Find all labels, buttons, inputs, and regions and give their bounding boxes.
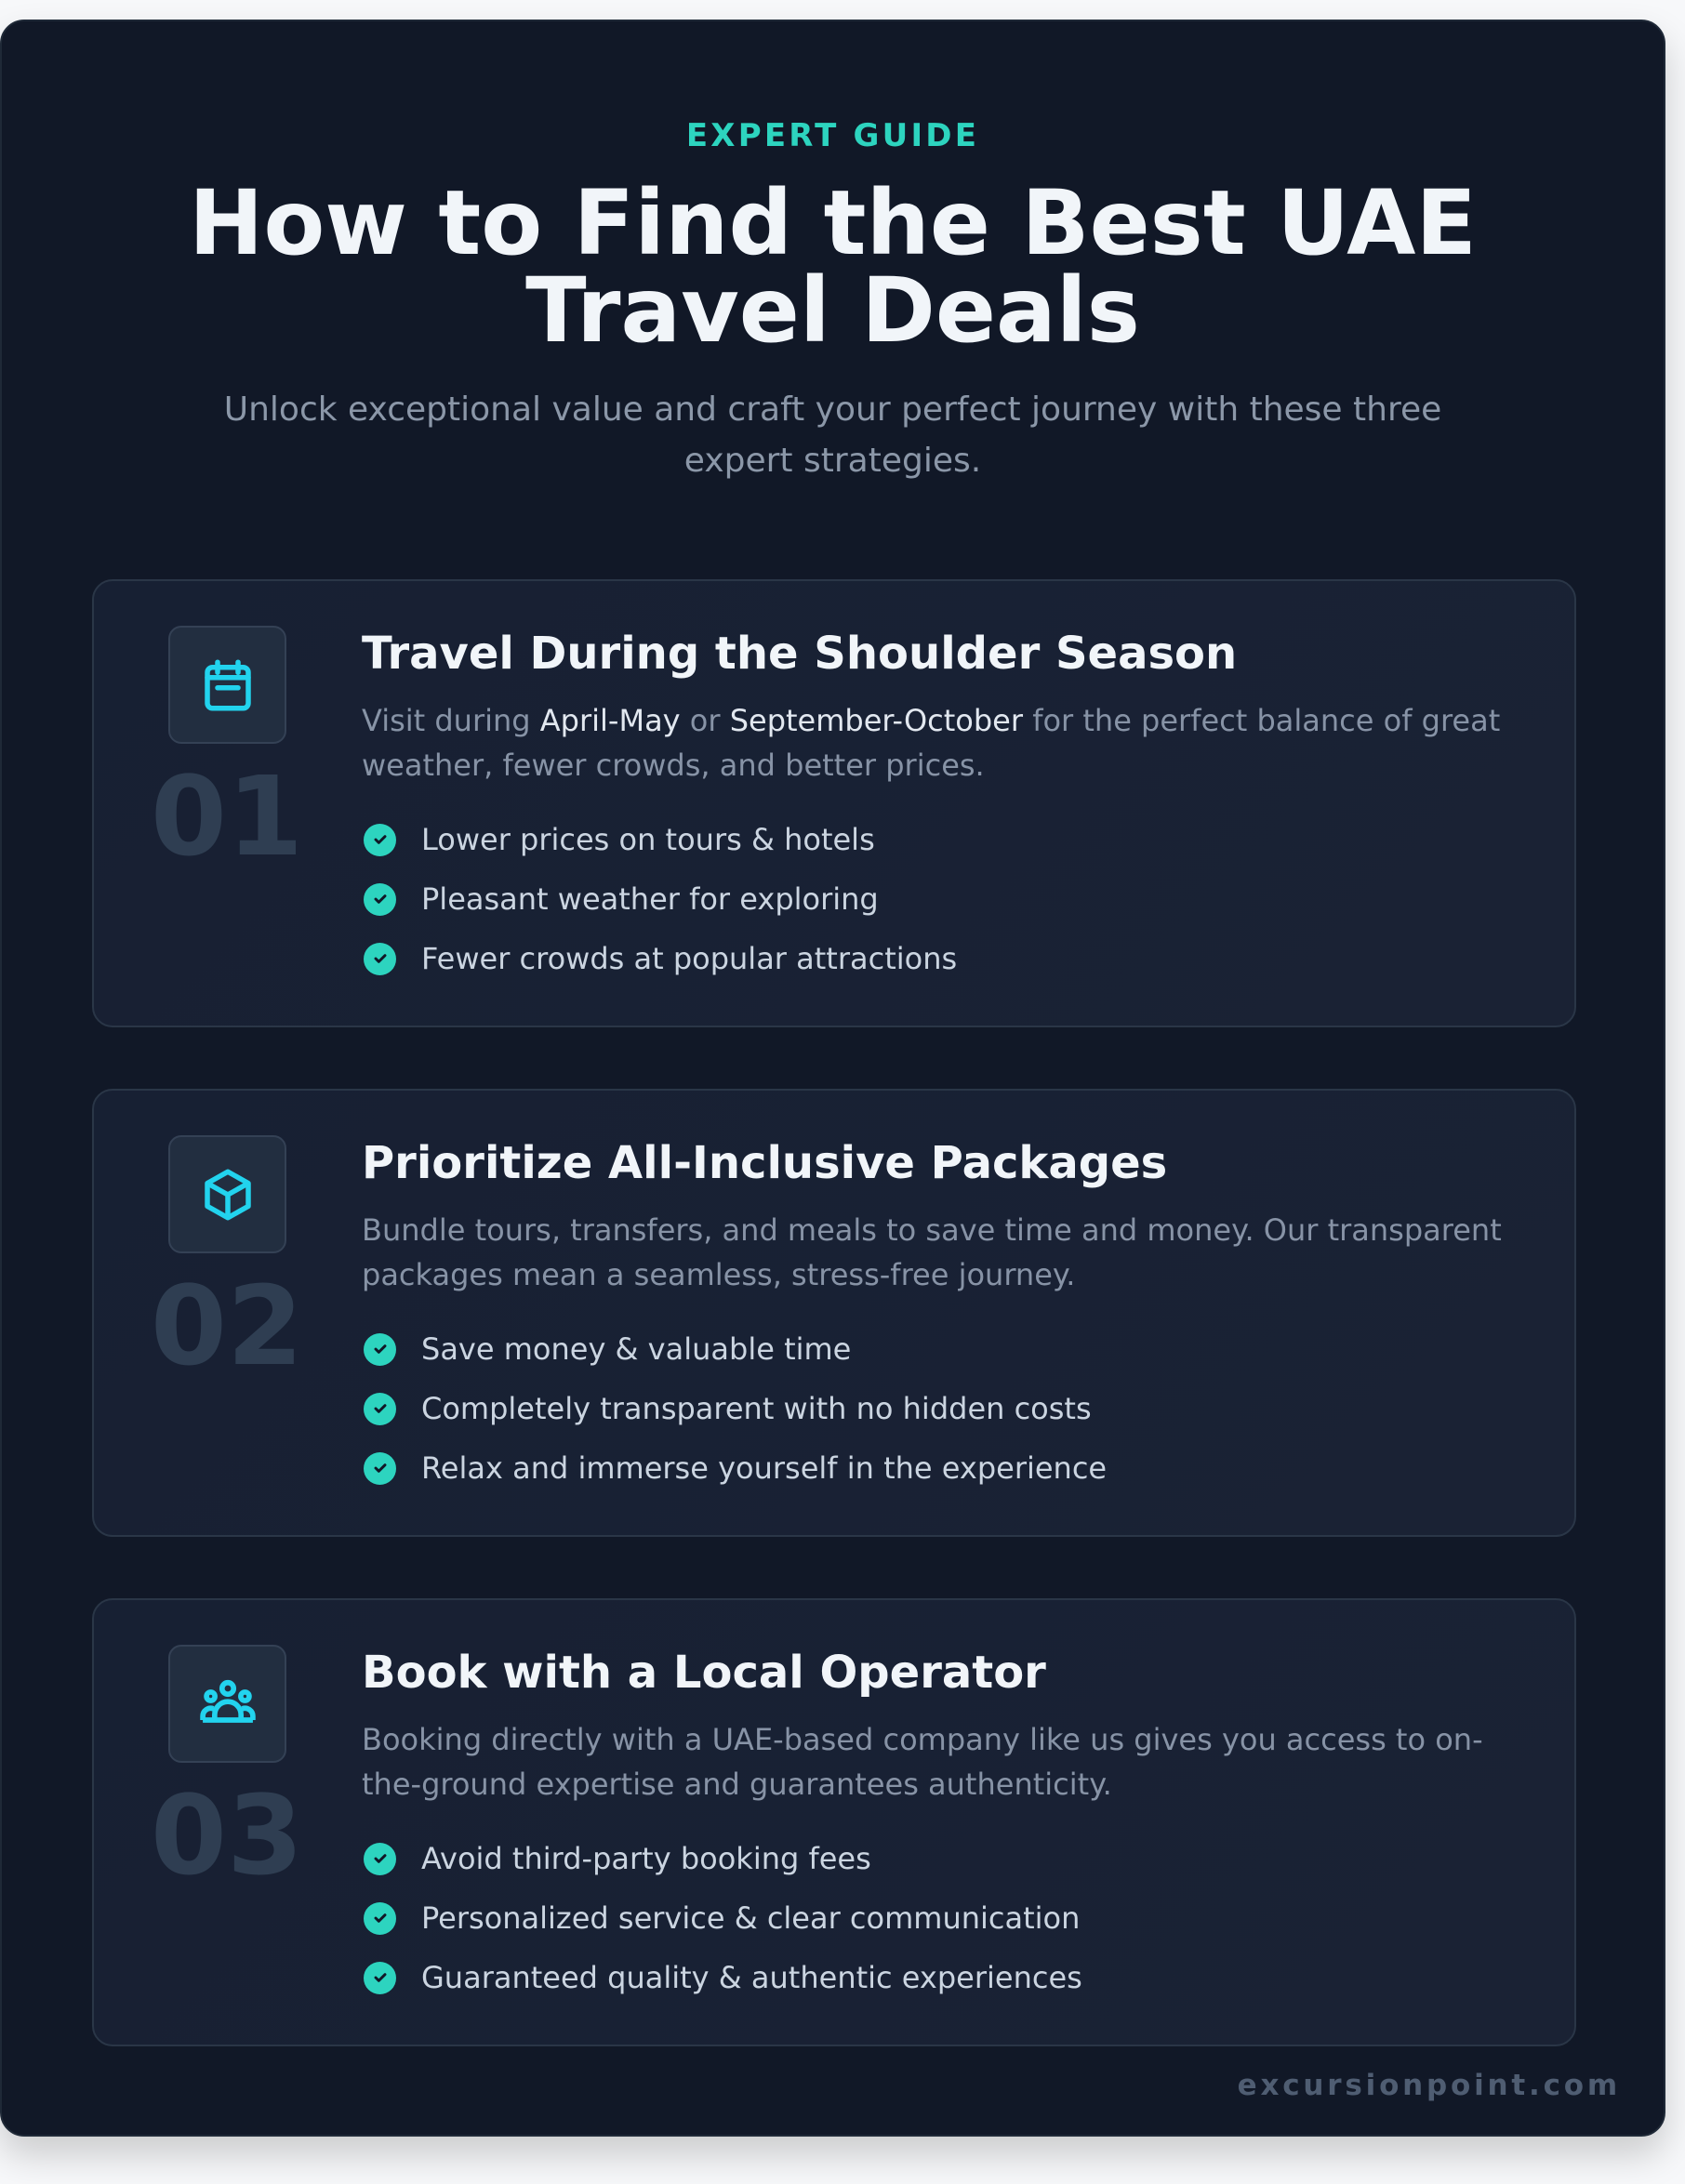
description: Visit during April-May or September-October for the perfect balance of great weather, fewer crowds, and better prices. (362, 703, 1500, 783)
description: Bundle tours, transfers, and meals to save time and money. Our transparent packages mean a seamless, stress-free journey. (362, 1212, 1502, 1292)
heading: Prioritize All-Inclusive Packages (362, 1137, 1167, 1189)
panel: local operator (92, 1598, 1576, 2046)
number 03: 03 (151, 1771, 303, 1899)
heading: Travel During the Shoulder Season (362, 628, 1237, 680)
panel: shoulder season (92, 579, 1576, 1027)
title (189, 171, 1477, 363)
benefit list: Relax and immerse yourself in the experience (421, 1450, 1107, 1486)
heading: Book with a Local Operator (362, 1647, 1046, 1699)
eyebrow label: EXPERT GUIDE (686, 117, 979, 154)
title: How to Find the Best UAE (189, 171, 1477, 275)
benefit list: Save money & valuable time (421, 1331, 851, 1367)
benefit list (364, 1331, 1107, 1486)
icon: calendar (168, 626, 286, 744)
footer: website: excursionpoint.com (1238, 2069, 1621, 2102)
benefit list (364, 1841, 1082, 1995)
number 02: 02 (151, 1262, 303, 1390)
benefit list (364, 822, 957, 976)
icon: group (168, 1645, 286, 1763)
benefit list: Avoid third-party booking fees (421, 1841, 871, 1876)
description: Booking directly with a UAE-based company like us gives you access to on-the-ground expertise and guarantees authenticity. (362, 1722, 1483, 1802)
number 01: 01 (151, 752, 303, 880)
title: Travel Deals (525, 258, 1140, 363)
benefit list: Fewer crowds at popular attractions (421, 941, 957, 976)
benefit list: Lower prices on tours & hotels (421, 822, 875, 857)
benefit list: Personalized service & clear communication (421, 1900, 1080, 1936)
benefit list: Pleasant weather for exploring (421, 881, 879, 917)
benefit list: Completely transparent with no hidden costs (421, 1391, 1092, 1426)
panel: all-inclusive packages (92, 1089, 1576, 1537)
icon: box (168, 1135, 286, 1253)
benefit list: Guaranteed quality & authentic experiences (421, 1960, 1082, 1995)
subtitle: Unlock exceptional value and craft your perfect journey with these three expert strategies. (224, 390, 1441, 480)
